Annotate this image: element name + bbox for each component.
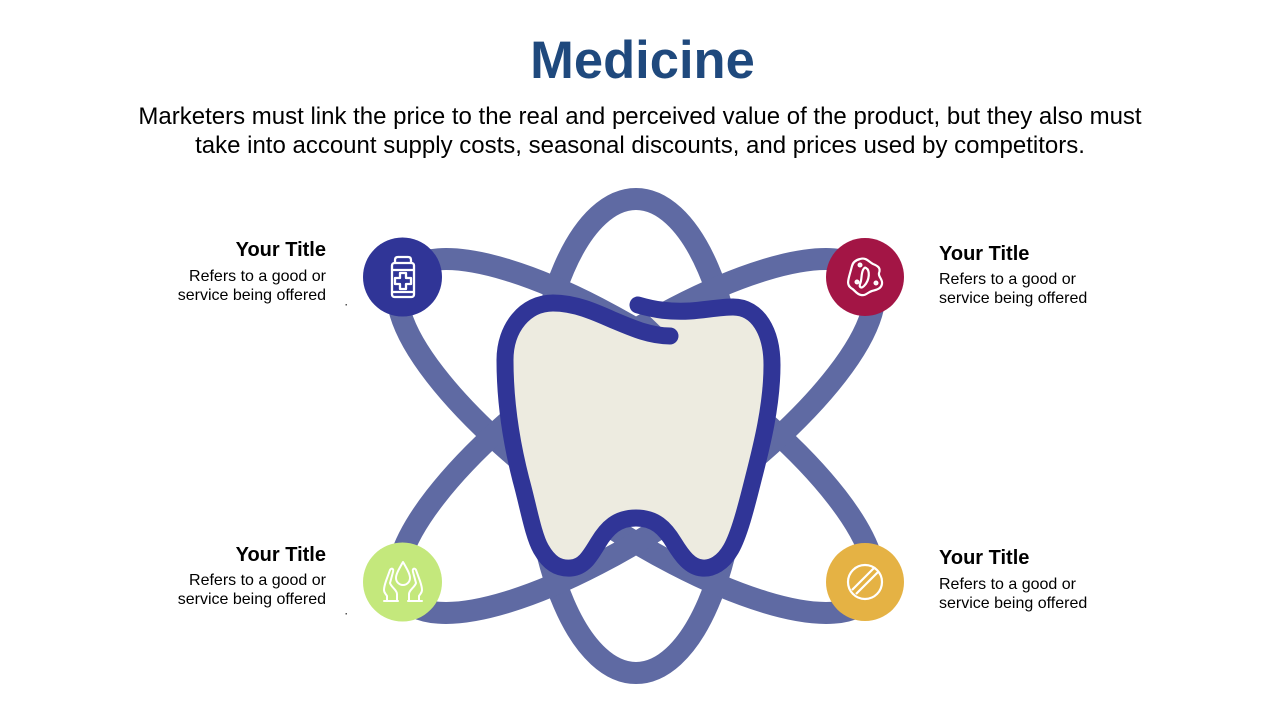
- label: bottom left: service being offered: [178, 591, 326, 608]
- label: bottom left: Your Title: [236, 544, 326, 566]
- label: top right: [939, 243, 1087, 307]
- icon: pill: [826, 543, 904, 621]
- label: bottom left: [178, 544, 327, 608]
- title: Medicine: [530, 31, 755, 90]
- label: top left: service being offered: [178, 287, 326, 304]
- label: top left: Your Title: [236, 239, 326, 261]
- icon: bacteria: [826, 238, 904, 316]
- label: bottom right: Refers to a good or: [939, 576, 1077, 593]
- label: top left: [178, 239, 327, 304]
- label: top right: service being offered: [939, 290, 1087, 307]
- intro paragraph: Marketers must link the price to the real and perceived value of the product, but they also must: [138, 103, 1142, 130]
- label: bottom left: Refers to a good or: [189, 572, 327, 589]
- label: top left: Refers to a good or: [189, 268, 327, 285]
- label: bottom right: [939, 547, 1087, 612]
- icon: hands and water drop: [363, 542, 442, 622]
- intro paragraph: take into account supply costs, seasonal discounts, and prices used by competitors.: [195, 132, 1085, 159]
- icon: medicine bottle: [363, 238, 442, 316]
- atom orbits: [352, 199, 920, 673]
- label: bottom right: service being offered: [939, 595, 1087, 612]
- label: top right: Your Title: [939, 243, 1029, 265]
- label: bottom right: Your Title: [939, 547, 1029, 569]
- intro paragraph: [138, 103, 1142, 159]
- tooth: [505, 303, 772, 568]
- label: top right: Refers to a good or: [939, 271, 1077, 288]
